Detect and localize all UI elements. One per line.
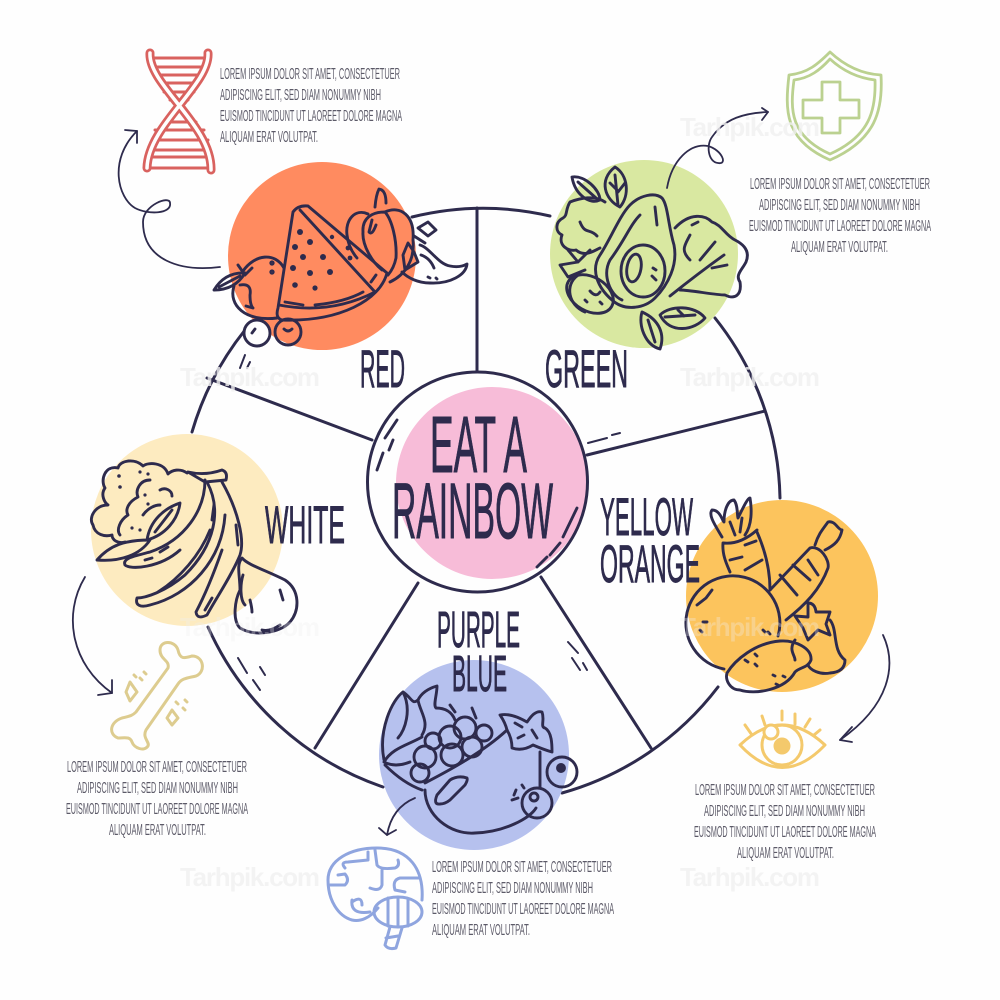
label: yellow orange xyxy=(600,488,700,594)
text block: brain: ADIPISCING ELIT, SED DIAM NONUMMY NIBH xyxy=(432,880,593,897)
title: eat a rainbow: EAT A xyxy=(430,400,527,489)
text: RED xyxy=(360,340,405,399)
watermarks xyxy=(180,112,820,892)
text: EUISMOD TINCIDUNT UT LAOREET DOLORE MAGNA xyxy=(432,901,614,918)
text block: dna xyxy=(220,66,402,146)
text block: brain xyxy=(432,859,614,939)
text block: dna: ADIPISCING ELIT, SED DIAM NONUMMY NIBH xyxy=(220,87,381,104)
text: LOREM IPSUM DOLOR SIT AMET, CONSECTETUER xyxy=(220,66,400,83)
watermarks: Tarhpik.com xyxy=(680,612,820,642)
wheel: outer ring and dividers xyxy=(192,208,780,793)
text block: dna: ALIQUAM ERAT VOLUTPAT. xyxy=(220,129,318,146)
text: RAINBOW xyxy=(392,466,553,555)
arrow: purple to brain xyxy=(379,798,415,835)
text: YELLOW xyxy=(600,488,693,547)
label: purple blue xyxy=(437,601,520,702)
food illustration: white vegetables and fruit xyxy=(91,461,297,633)
text: LOREM IPSUM DOLOR SIT AMET, CONSECTETUER xyxy=(432,859,612,876)
icon: shield with cross xyxy=(787,52,881,160)
text: WHITE xyxy=(265,496,345,555)
text block: eye xyxy=(694,782,876,862)
hub: pink disc and ring xyxy=(368,372,588,592)
watermarks: Tarhpik.com xyxy=(180,612,320,642)
arrow: red to dna xyxy=(119,130,220,268)
food illustration: yellow and orange vegetables xyxy=(686,498,845,692)
watermarks: Tarhpik.com xyxy=(680,362,820,392)
icon: brain xyxy=(328,848,422,949)
label: purple blue: BLUE xyxy=(452,645,507,702)
watermarks: Tarhpik.com xyxy=(680,862,820,892)
colour circle: red xyxy=(228,162,416,350)
watermarks: Tarhpik.com xyxy=(180,362,320,392)
text: EUISMOD TINCIDUNT UT LAOREET DOLORE MAGNA xyxy=(66,801,248,818)
watermarks: Tarhpik.com xyxy=(180,862,320,892)
watermarks: Tarhpik.com xyxy=(680,112,820,142)
text: PURPLE xyxy=(437,601,520,658)
text: ADIPISCING ELIT, SED DIAM NONUMMY NIBH xyxy=(77,780,238,797)
text block: shield: ALIQUAM ERAT VOLUTPAT. xyxy=(791,239,888,256)
text block: shield xyxy=(749,176,931,256)
arrow: orange to eye xyxy=(840,635,889,742)
decorative ticks on the wheel xyxy=(238,355,620,690)
food illustration: red fruits xyxy=(214,189,467,346)
text: GREEN xyxy=(545,340,628,399)
text block: bone xyxy=(66,759,248,839)
icon: dna xyxy=(147,53,211,170)
icon: eye xyxy=(740,711,825,768)
colour circle: white xyxy=(91,434,283,626)
food illustration: purple and blue vegetables xyxy=(383,686,577,833)
text: LOREM IPSUM DOLOR SIT AMET, CONSECTETUER xyxy=(67,759,247,776)
arrow: green to shield xyxy=(667,108,768,188)
title: eat a rainbow xyxy=(392,400,553,555)
text block: brain: ALIQUAM ERAT VOLUTPAT. xyxy=(432,922,530,939)
food illustration: green vegetables xyxy=(557,167,747,349)
colour circle: yellow orange xyxy=(686,500,878,692)
icon: bone xyxy=(112,642,202,749)
text block: eye: ALIQUAM ERAT VOLUTPAT. xyxy=(737,845,834,862)
text block: bone: ALIQUAM ERAT VOLUTPAT. xyxy=(109,822,206,839)
arrow: white to bone xyxy=(73,577,112,695)
text: ORANGE xyxy=(600,535,700,594)
colour circle: purple blue xyxy=(379,660,569,850)
text: EUISMOD TINCIDUNT UT LAOREET DOLORE MAGNA xyxy=(220,108,402,125)
colour circle: green xyxy=(550,160,738,348)
